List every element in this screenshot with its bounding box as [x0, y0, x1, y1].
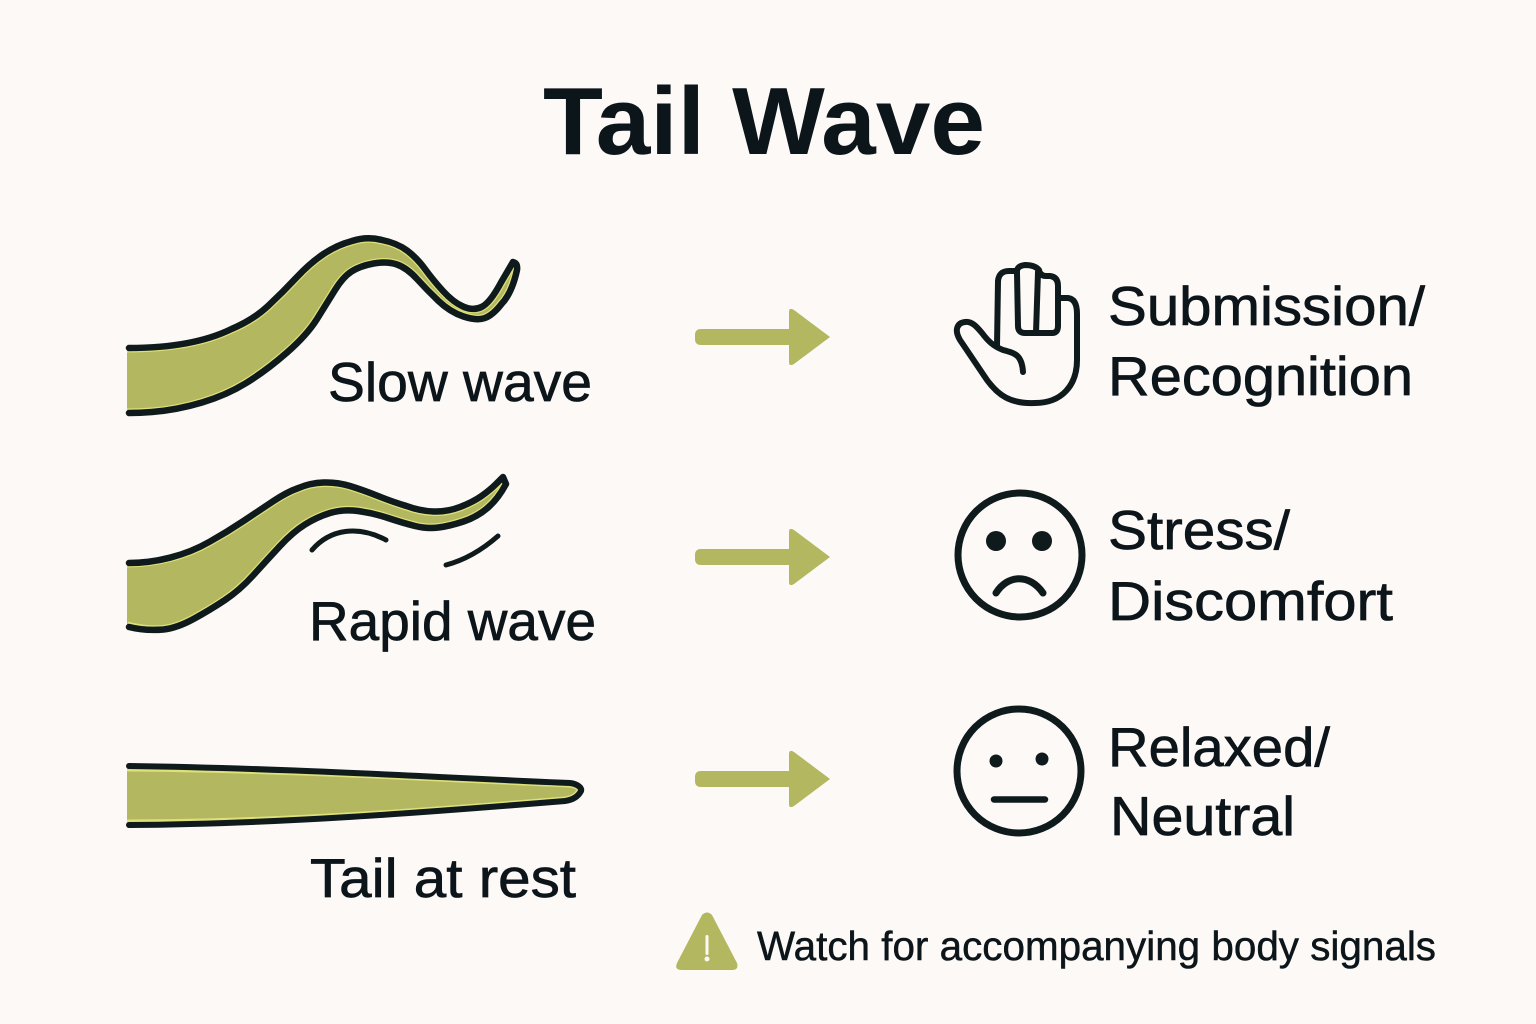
label: rapid wave: Rapid wave	[309, 590, 596, 652]
motion line: left	[312, 531, 386, 550]
text: relaxed / neutral: Neutral	[1110, 785, 1295, 847]
arrow: rapid wave to stress	[695, 529, 830, 585]
text: stress / discomfort	[1108, 499, 1393, 632]
motion line: right	[446, 536, 498, 565]
label: tail at rest: Tail at rest	[310, 847, 576, 909]
text: stress / discomfort: Discomfort	[1108, 570, 1393, 632]
text: submission / recognition: Recognition	[1108, 345, 1413, 407]
icon: slow wave tail	[127, 238, 517, 413]
icon: resting tail	[127, 766, 581, 825]
arrow: slow wave to submission	[695, 309, 830, 365]
text: relaxed / neutral	[1108, 716, 1331, 847]
icon: neutral face	[957, 709, 1081, 833]
callout: body signals note: Watch for accompanying body signals	[757, 923, 1436, 969]
title: Tail Wave	[543, 68, 985, 175]
icon: raised hand	[957, 265, 1077, 403]
text: submission / recognition: Submission/	[1108, 275, 1426, 337]
text: submission / recognition	[1108, 275, 1426, 407]
icon: sad face	[958, 493, 1082, 617]
label: slow wave: Slow wave	[328, 351, 592, 413]
arrow: rest to relaxed	[695, 751, 830, 807]
text: relaxed / neutral: Relaxed/	[1108, 716, 1331, 778]
icon: warning triangle	[676, 912, 737, 970]
panel: tail at rest row	[127, 766, 581, 909]
panel: slow wave row	[127, 238, 592, 413]
text: stress / discomfort: Stress/	[1108, 499, 1291, 561]
icon: rapid wave tail	[127, 477, 506, 630]
panel: rapid wave row	[127, 477, 596, 652]
